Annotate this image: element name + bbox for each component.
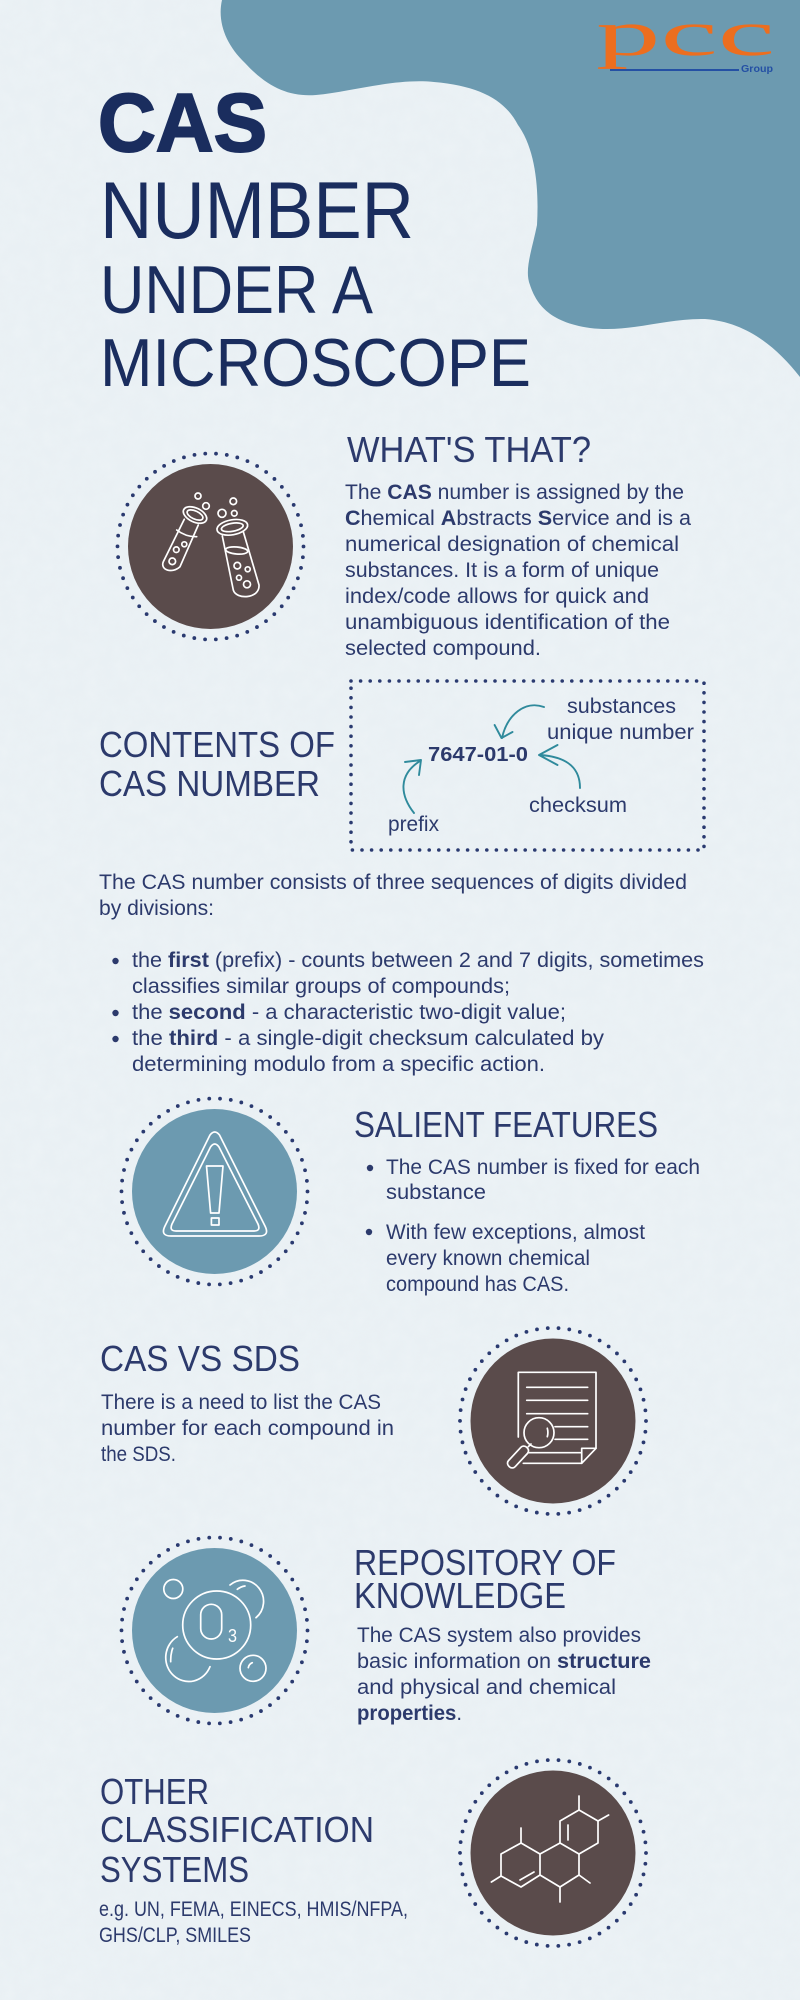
text block: repository xyxy=(357,1624,651,1725)
heading: repository of knowledge: KNOWLEDGE xyxy=(354,1575,566,1616)
text block: examples: e.g. UN, FEMA, EINECS, HMIS/NFPA, xyxy=(99,1898,408,1921)
heading: contents of CAS number: CONTENTS OF xyxy=(99,724,335,765)
heading: contents of CAS number xyxy=(99,724,335,804)
text block: three sequences: the third - a single-digit checksum calculated by xyxy=(132,1027,605,1050)
section: repository of knowledge xyxy=(354,1542,651,1725)
heading: salient features: SALIENT FEATURES xyxy=(354,1104,658,1145)
icon: molecule xyxy=(460,1760,646,1946)
label: substances unique number xyxy=(547,695,694,744)
section: what's that xyxy=(345,429,691,660)
icon: warning triangle xyxy=(122,1098,308,1284)
text block: three sequences: The CAS number consists of three sequences of digits divided xyxy=(99,871,687,894)
section: CAS vs SDS xyxy=(100,1338,394,1466)
bullet list: features: compound has CAS. xyxy=(386,1273,569,1296)
text block: examples: GHS/CLP, SMILES xyxy=(99,1924,251,1947)
text block: SDS: There is a need to list the CAS xyxy=(101,1391,381,1414)
text block: repository: basic information on structure xyxy=(357,1650,651,1673)
logo: PCC Group: Group xyxy=(741,63,773,75)
heading: what's that: WHAT'S THAT? xyxy=(347,429,591,470)
text block: examples xyxy=(99,1898,408,1947)
text block: SDS xyxy=(101,1391,394,1466)
label: substances unique number: substances xyxy=(567,695,676,718)
text block: three sequences: classifies similar groups of compounds; xyxy=(132,975,510,998)
text block: definition: index/code allows for quick and xyxy=(345,585,649,608)
heading: repository of knowledge xyxy=(354,1542,616,1616)
text block: definition xyxy=(345,481,691,660)
text block: three sequences: by divisions: xyxy=(99,897,214,920)
text block: definition: substances. It is a form of unique xyxy=(345,559,659,582)
panel: CAS number diagram xyxy=(351,681,704,850)
text block: repository: properties. xyxy=(357,1702,462,1725)
text block: SDS: the SDS. xyxy=(101,1443,176,1466)
bullet list: features: The CAS number is fixed for each xyxy=(386,1156,700,1179)
arrow: to checksum xyxy=(539,745,580,788)
title: MICROSCOPE xyxy=(100,325,531,401)
text block: three sequences: the second - a characteristic two-digit value; xyxy=(132,1001,566,1024)
label: substances unique number: unique number xyxy=(547,721,694,744)
heading: repository of knowledge: REPOSITORY OF xyxy=(354,1542,616,1583)
bullet list: features: substance xyxy=(386,1181,486,1204)
text block: three sequences xyxy=(99,871,704,1076)
text block: repository: The CAS system also provides xyxy=(357,1624,641,1647)
heading: CAS vs SDS: CAS VS SDS xyxy=(100,1338,300,1379)
heading: other classification systems: OTHER xyxy=(100,1771,209,1812)
title: CAS xyxy=(98,76,267,169)
heading: contents of CAS number: CAS NUMBER xyxy=(99,763,320,804)
icon: document with magnifier xyxy=(460,1328,646,1514)
text block: definition: Chemical Abstracts Service and is a xyxy=(345,507,691,530)
logo: PCC Group xyxy=(596,0,775,75)
heading: other classification systems xyxy=(100,1771,374,1890)
title: UNDER A xyxy=(100,252,374,328)
decorative blob: top right xyxy=(221,0,800,377)
label: prefix: prefix xyxy=(388,813,439,836)
text block: repository: and physical and chemical xyxy=(357,1676,616,1699)
bullet list: features xyxy=(366,1156,700,1296)
arrow: to prefix xyxy=(403,760,421,813)
text block: definition: selected compound. xyxy=(345,637,541,660)
icon: O3 bubbles xyxy=(122,1538,308,1724)
text block: three sequences: determining modulo from a specific action. xyxy=(132,1053,545,1076)
text block: three sequences: the first (prefix) - counts between 2 and 7 digits, sometimes xyxy=(132,949,704,972)
bullet list: features: every known chemical xyxy=(386,1247,590,1270)
text block: definition: unambiguous identification of the xyxy=(345,611,670,634)
text block: definition: numerical designation of chemical xyxy=(345,533,679,556)
icon: test tubes xyxy=(118,454,304,640)
heading: other classification systems: SYSTEMS xyxy=(100,1849,249,1890)
section: other classification systems xyxy=(99,1771,408,1947)
label: checksum: checksum xyxy=(529,794,627,817)
arrow: to unique number xyxy=(495,705,544,738)
section: salient features xyxy=(354,1104,700,1296)
text block: definition: The CAS number is assigned by the xyxy=(345,481,684,504)
text block: SDS: number for each compound in xyxy=(101,1417,394,1440)
bullet list: features: With few exceptions, almost xyxy=(386,1221,645,1244)
heading: other classification systems: CLASSIFICATION xyxy=(100,1809,374,1850)
title: NUMBER xyxy=(100,166,414,256)
CAS number example: 7647-01-0 xyxy=(428,744,528,766)
title xyxy=(98,76,531,401)
logo: PCC Group: pcc xyxy=(596,0,775,70)
icon: O3 bubbles: 3 xyxy=(228,1626,237,1646)
